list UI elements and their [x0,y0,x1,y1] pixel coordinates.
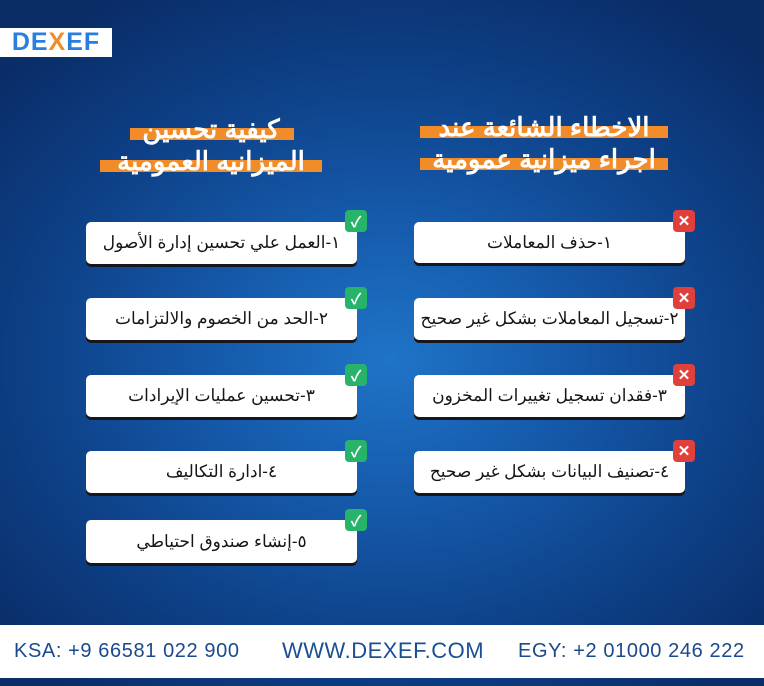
icon x 2: ✕ [678,290,690,307]
icon x 1 [673,210,695,232]
item 4 [414,451,685,493]
icon check 2: ✓ [351,290,361,308]
icon check 5: ✓ [351,512,361,530]
footer contact bar [0,625,764,678]
item 1 [86,222,357,264]
item 2 [86,298,357,340]
item 5: ٥-إنشاء صندوق احتياطي [136,532,307,550]
item 2 [414,298,685,340]
heading: left: الميزانيه العمومية [117,146,305,176]
heading: right [420,112,668,175]
logo: DE EF [12,28,100,56]
item 5 [86,520,357,563]
item 3 [86,375,357,417]
item 4: ٤-ادارة التكاليف [166,462,277,481]
item 3: ٣-فقدان تسجيل تغييرات المخزون [432,386,667,405]
item 3 [414,375,685,417]
panel: improvements [86,210,367,566]
logo: X [49,28,66,56]
icon check 3: ✓ [351,368,361,384]
icon x 3: ✕ [678,367,690,384]
icon check 1: ✓ [351,214,361,230]
item 4: ٤-تصنيف البيانات بشكل غير صحيح [430,462,669,481]
item 1: ١-حذف المعاملات [487,232,612,252]
heading: right: اجراء ميزانية عمومية [432,144,656,174]
heading: right: الاخطاء الشائعة عند [438,112,650,142]
icon x 4 [673,440,695,462]
icon check 5 [345,509,367,531]
item 1 [414,222,685,263]
icon check 1 [345,210,367,232]
icon check 3 [345,364,367,386]
icon x 4: ✕ [678,443,690,460]
item 2: ٢-الحد من الخصوم والالتزامات [115,309,328,328]
icon check 4: ✓ [351,444,361,460]
ksa phone: KSA: +9 66581 022 900 [14,640,240,662]
icon x 1: ✕ [678,213,690,230]
item 2: ٢-تسجيل المعاملات بشكل غير صحيح [420,309,679,328]
icon check 4 [345,440,367,462]
panel: mistakes [414,210,695,496]
icon x 2 [673,287,695,309]
item 4 [86,451,357,493]
icon check 2 [345,287,367,309]
egypt phone: EGY: +2 01000 246 222 [518,640,745,662]
item 1: ١-العمل علي تحسين إدارة الأصول [103,233,340,252]
heading: left: كيفية تحسين [142,114,280,144]
heading: left [100,114,322,177]
website: WWW.DEXEF.COM [282,638,484,663]
item 3: ٣-تحسين عمليات الإيرادات [128,386,315,405]
icon x 3 [673,364,695,386]
